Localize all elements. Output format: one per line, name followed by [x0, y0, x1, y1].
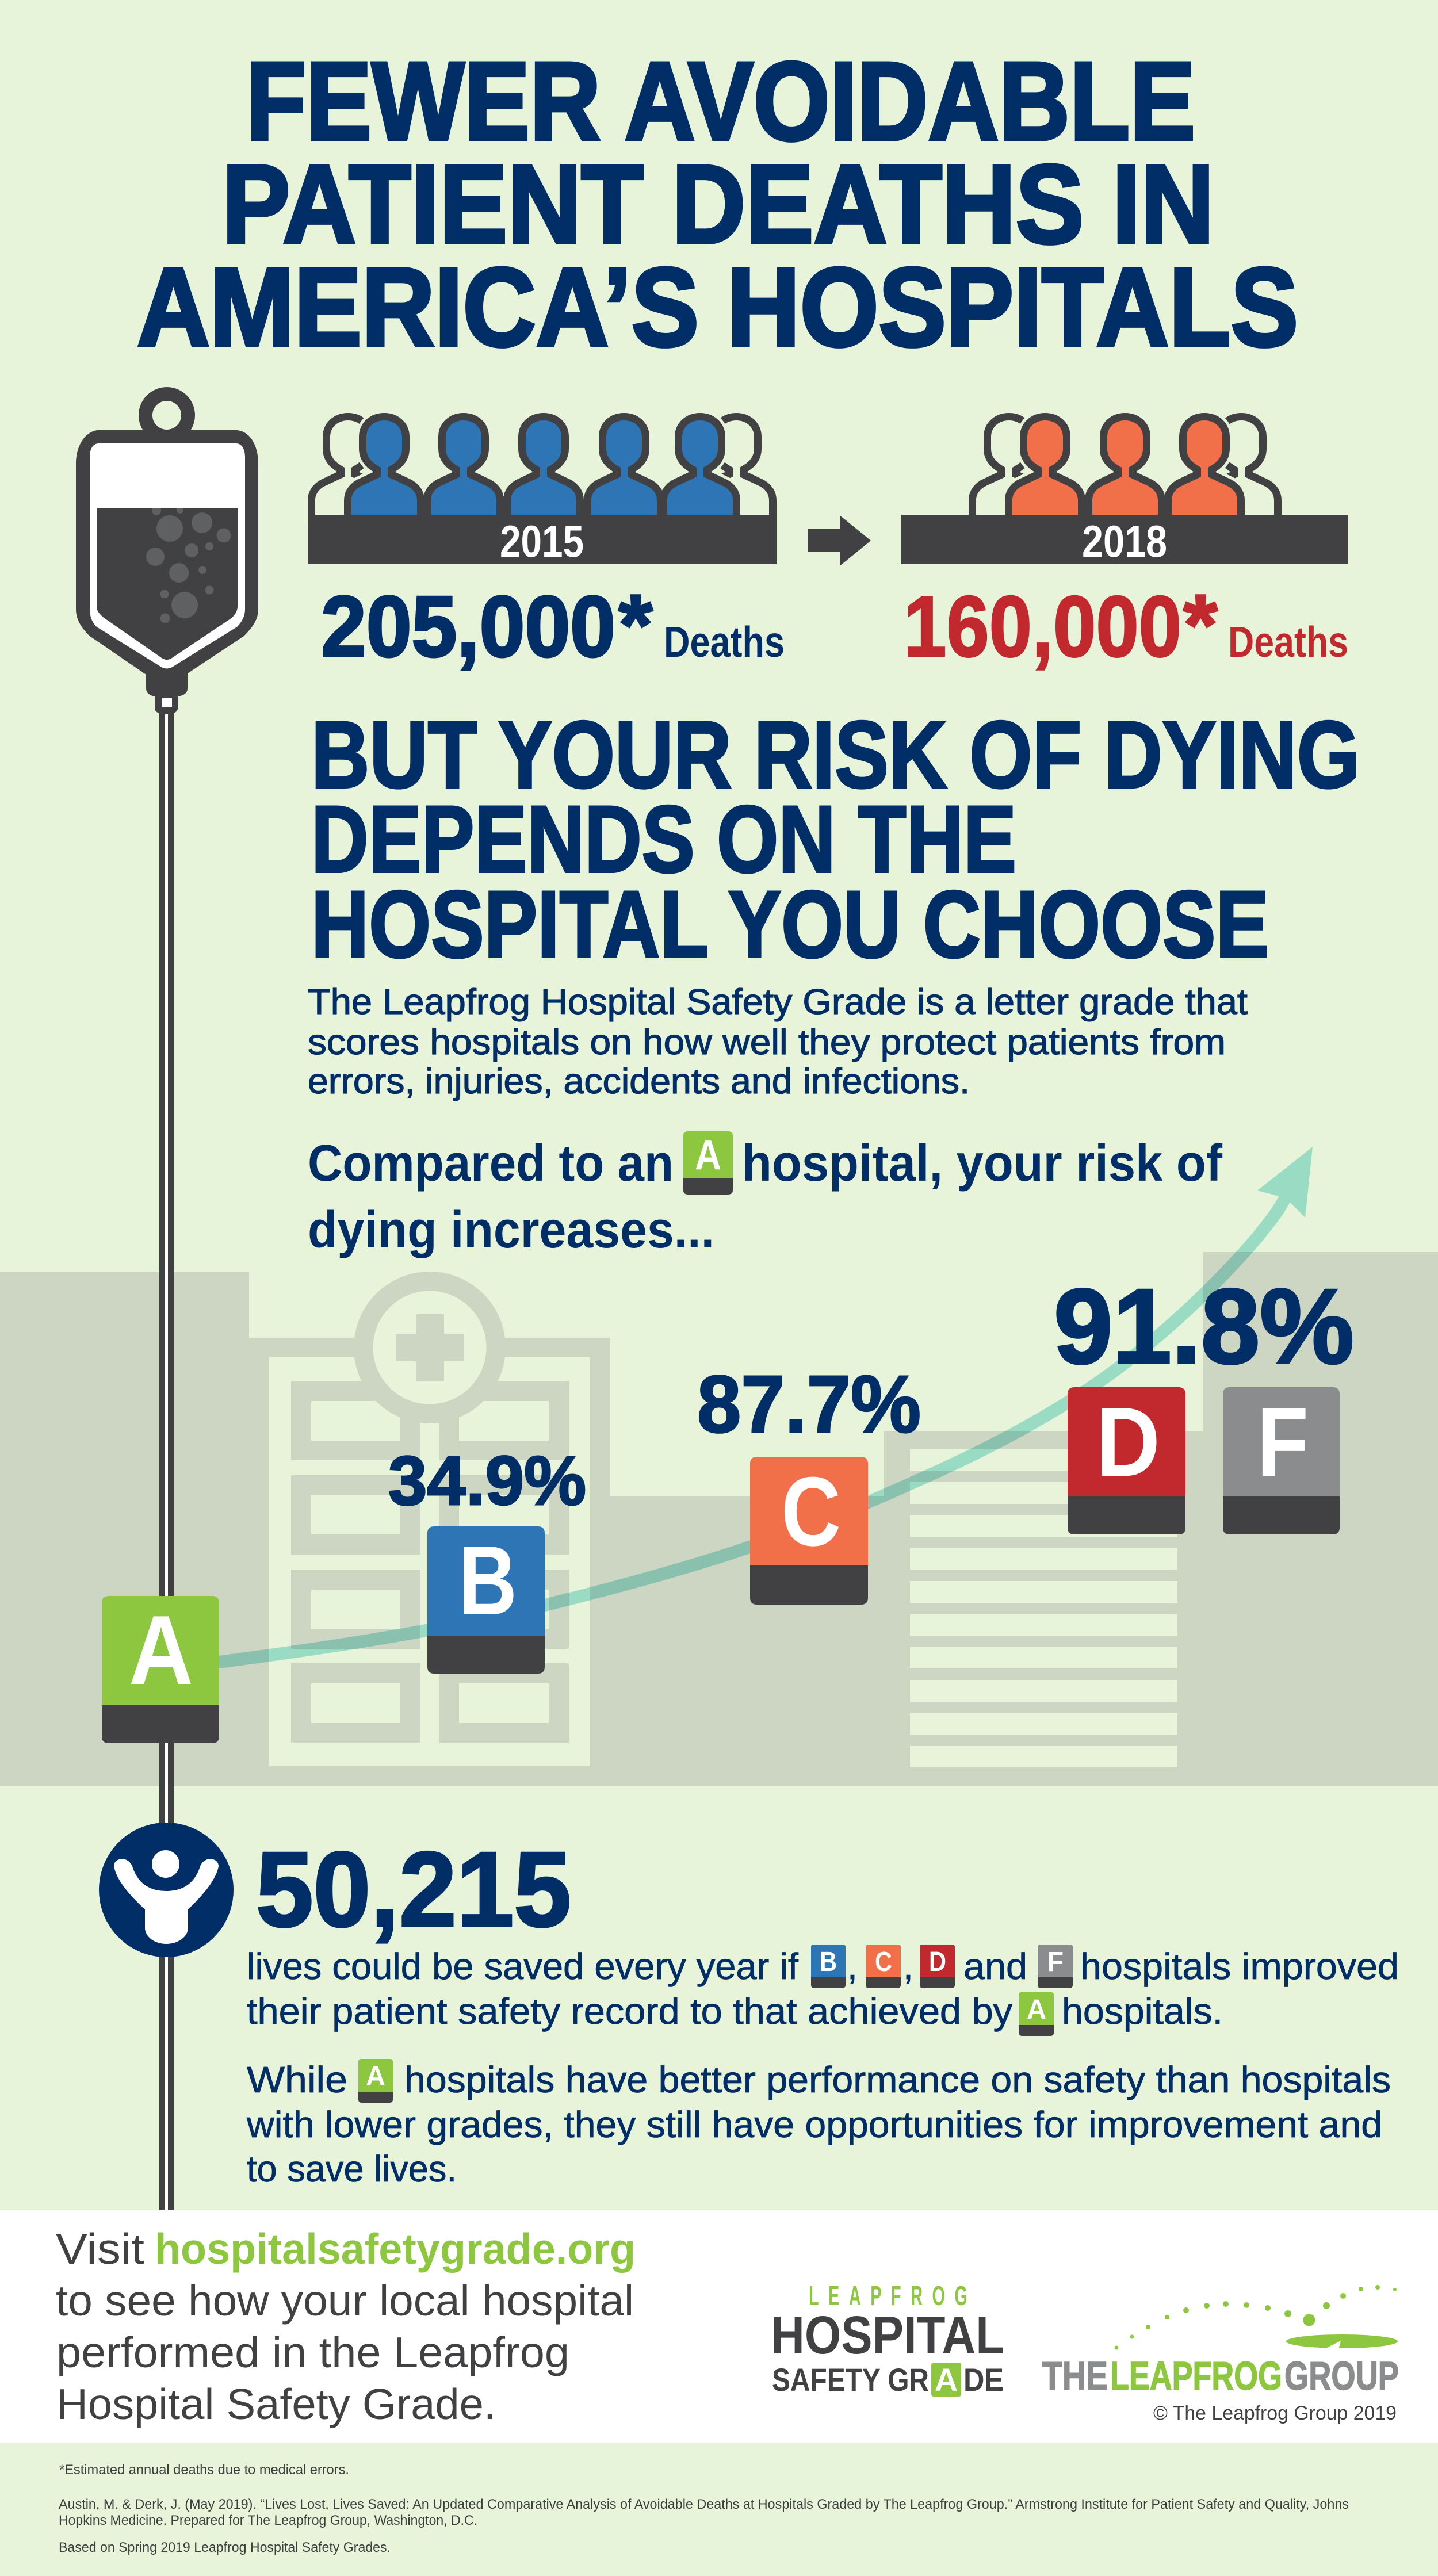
2018 people row — [901, 420, 1348, 567]
percentage: 87.7%: 87.7% — [697, 1358, 921, 1449]
160,000 deaths stat: 160,000 — [904, 578, 1181, 675]
badge: grade A — [102, 1595, 219, 1743]
lives saved text: While — [247, 2059, 347, 2100]
inline badges: A — [366, 2061, 385, 2092]
logo: Leapfrog Hospital Safety Grade: SAFETY GR — [772, 2361, 929, 2398]
logo: The Leapfrog Group: © The Leapfrog Group 2019 — [1153, 2402, 1397, 2424]
visit text: hospitalsafetygrade.org — [155, 2225, 636, 2273]
badge: grade D: D — [1096, 1387, 1160, 1497]
lives saved text: , — [903, 1946, 913, 1987]
logo: The Leapfrog Group: LEAPFROG — [1110, 2353, 1282, 2398]
lives saved text: hospitals. — [1062, 1991, 1223, 2032]
percentage: 34.9%: 34.9% — [388, 1441, 586, 1519]
2015 people row — [308, 420, 777, 567]
badge: grade F: F — [1257, 1387, 1309, 1497]
visit text: to see how your local hospital — [56, 2276, 634, 2325]
logo: Leapfrog Hospital Safety Grade: HOSPITAL — [771, 2305, 1004, 2365]
comparison lead-in: hospital, your risk of — [742, 1135, 1223, 1192]
160,000 deaths stat: * — [1183, 576, 1218, 673]
inline badges: C — [875, 1947, 892, 1977]
title: PATIENT DEATHS IN — [222, 142, 1214, 267]
white call-to-action panel — [0, 2210, 1438, 2443]
description paragraph: The Leapfrog Hospital Safety Grade is a letter grade that — [308, 982, 1248, 1022]
description paragraph: errors, injuries, accidents and infections. — [308, 1062, 970, 1101]
comparison lead-in — [308, 1131, 1223, 1259]
IV tube — [159, 707, 174, 2210]
badge: grade B: B — [458, 1526, 517, 1636]
title: FEWER AVOIDABLE — [246, 39, 1195, 164]
visit text: Visit — [56, 2225, 144, 2273]
lives saved text: to save lives. — [247, 2148, 457, 2190]
logo: The Leapfrog Group: GROUP — [1284, 2353, 1399, 2398]
icon: IV bag — [76, 394, 258, 714]
badge: grade F — [1223, 1387, 1340, 1534]
160,000 deaths stat — [904, 576, 1348, 675]
description paragraph: scores hospitals on how well they protect patients from — [308, 1023, 1226, 1062]
footnotes: *Estimated annual deaths due to medical errors. — [59, 2462, 349, 2478]
title — [137, 39, 1298, 370]
2015 people row: 2015 — [500, 516, 584, 567]
inline badges: D — [929, 1947, 946, 1977]
lives saved text: hospitals have better performance on safety than hospitals — [404, 2059, 1391, 2100]
logo: Leapfrog Hospital Safety Grade: LEAPFROG — [809, 2281, 977, 2311]
lives saved text: their patient safety record to that achieved by — [247, 1991, 1012, 2032]
badge: grade A: A — [129, 1595, 193, 1705]
lives saved text: hospitals improved — [1080, 1946, 1399, 1987]
footnotes: Austin, M. & Derk, J. (May 2019). “Lives Lost, Lives Saved: An Updated Comparative Analysis of Avoidable Deaths at Hospitals Graded by The Leapfrog Group.” Armstrong Institute for Patient Safety and Quality, Johns — [59, 2497, 1349, 2512]
logo: Leapfrog Hospital Safety Grade — [771, 2281, 1004, 2398]
inline badges: B — [820, 1947, 837, 1977]
visit text — [56, 2225, 636, 2428]
205,000 deaths stat: * — [618, 576, 653, 673]
comparison lead-in: dying increases... — [308, 1201, 714, 1259]
badge: grade D — [1068, 1387, 1185, 1534]
205,000 deaths stat: Deaths — [664, 618, 785, 666]
lives saved text: lives could be saved every year if — [247, 1946, 798, 1987]
inline badges: F — [1047, 1947, 1064, 1977]
logo: Leapfrog Hospital Safety Grade: A — [935, 2361, 958, 2398]
lives saved text: and — [963, 1946, 1027, 1987]
subheading: HOSPITAL YOU CHOOSE — [311, 871, 1269, 977]
title: AMERICA’S HOSPITALS — [137, 245, 1298, 370]
icon: person with raised arms — [99, 1823, 234, 1957]
2018 people row: 2018 — [1082, 516, 1167, 567]
footnotes: Based on Spring 2019 Leapfrog Hospital Safety Grades. — [59, 2540, 391, 2555]
description paragraph — [308, 982, 1248, 1101]
lives saved text: with lower grades, they still have opportunities for improvement and — [246, 2104, 1382, 2145]
visit text: Hospital Safety Grade. — [56, 2380, 496, 2428]
subheading: DEPENDS ON THE — [311, 786, 1016, 892]
205,000 deaths stat — [321, 576, 785, 675]
logo: The Leapfrog Group — [1042, 2285, 1399, 2424]
lives saved text: , — [847, 1946, 858, 1987]
160,000 deaths stat: Deaths — [1228, 618, 1348, 666]
205,000 deaths stat: 205,000 — [321, 578, 615, 675]
badge: grade C: C — [781, 1457, 841, 1567]
logo: Leapfrog Hospital Safety Grade: DE — [963, 2361, 1004, 2398]
arrow between years — [808, 515, 871, 566]
footnotes — [59, 2462, 1349, 2555]
big number: 50,215: 50,215 — [256, 1831, 571, 1949]
visit text: performed in the Leapfrog — [56, 2328, 569, 2376]
inline badges: A — [1027, 1995, 1046, 2025]
logo: The Leapfrog Group: THE — [1042, 2353, 1108, 2398]
comparison lead-in: Compared to an — [308, 1135, 674, 1192]
subheading — [311, 702, 1360, 977]
inline badges — [358, 1945, 1073, 2103]
comparison lead-in: A — [695, 1132, 721, 1178]
background buildings — [0, 1252, 1438, 1786]
lives saved text — [246, 1946, 1399, 2190]
percentage: 91.8%: 91.8% — [1054, 1268, 1354, 1386]
rising risk curve arrow — [190, 1147, 1313, 1666]
footnotes: Hopkins Medicine. Prepared for The Leapfrog Group, Washington, D.C. — [59, 2513, 477, 2528]
badge: grade C — [750, 1457, 868, 1605]
badge: grade B — [427, 1526, 545, 1674]
